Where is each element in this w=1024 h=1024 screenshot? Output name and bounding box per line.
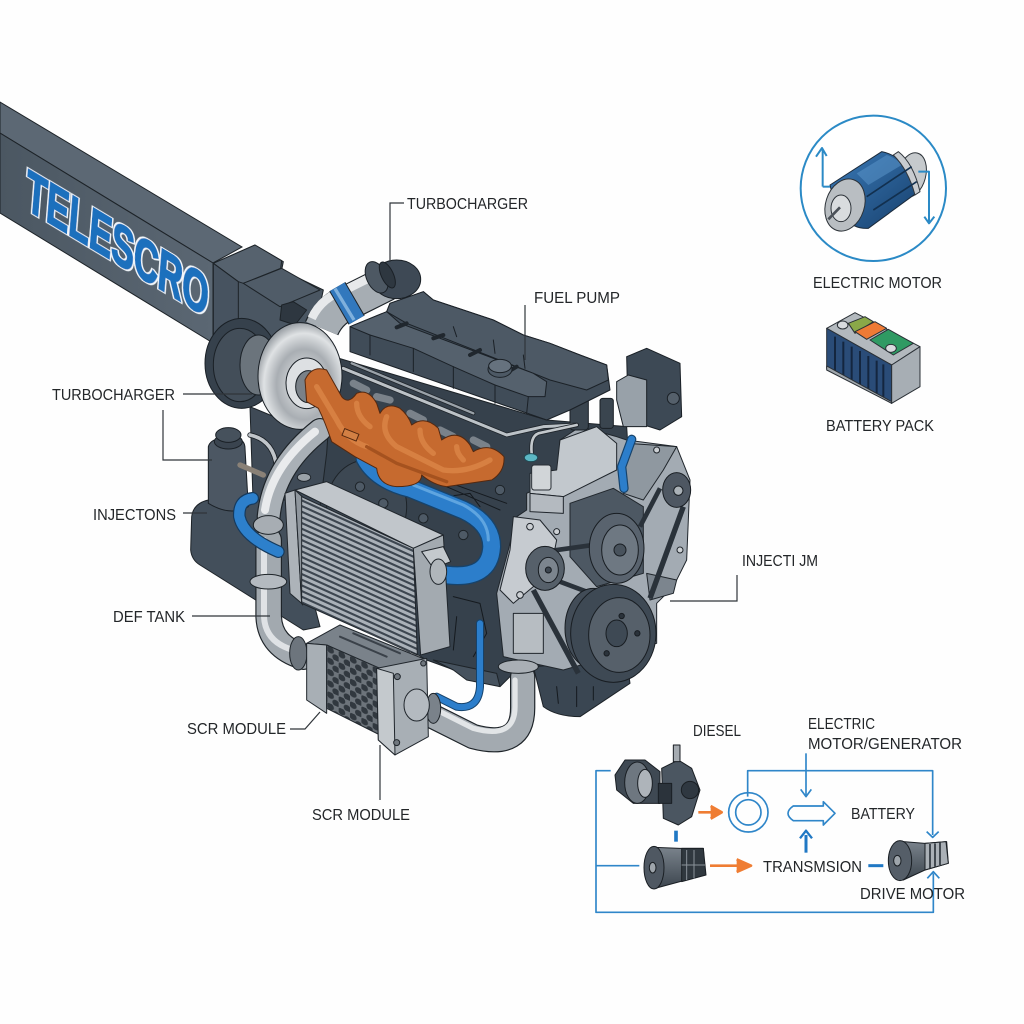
label: electric motor/generator: MOTOR/GENERATOR xyxy=(808,736,962,753)
upper turbocharger clamp xyxy=(361,258,421,299)
label: battery: BATTERY xyxy=(851,806,915,823)
battery pack icon xyxy=(827,313,920,403)
label: electric motor/generator: ELECTRIC xyxy=(808,716,875,733)
SCR module xyxy=(307,625,429,755)
label: turbocharger left: TURBOCHARGER xyxy=(52,387,175,404)
left blue hose xyxy=(239,498,278,552)
icon: drive motor xyxy=(888,841,948,881)
exhaust outlet pipe xyxy=(420,660,538,740)
label: fuel pump: FUEL PUMP xyxy=(534,290,620,307)
valve cover xyxy=(350,292,610,420)
electronics box xyxy=(570,348,682,430)
boom text: TELESCRO: TELESCRO xyxy=(24,157,211,329)
intercooler xyxy=(285,473,451,655)
label: diesel: DIESEL xyxy=(693,723,741,740)
timing cover and front housing xyxy=(497,427,690,670)
fuel rail xyxy=(343,363,577,490)
label: injectons: INJECTONS xyxy=(93,507,176,524)
silver intake pipe: lower run xyxy=(250,430,320,670)
blue return line xyxy=(437,439,632,707)
leader lines xyxy=(163,203,737,800)
blue arrow up and dashes xyxy=(676,831,883,866)
powertrain flow diagram xyxy=(596,745,948,912)
label: scr module bottom: SCR MODULE xyxy=(312,807,410,824)
electric motor icon xyxy=(801,116,946,261)
label: battery pack: BATTERY PACK xyxy=(826,418,935,435)
engine illustration xyxy=(191,245,691,755)
icon: transmission unit xyxy=(644,846,706,889)
label: electric motor: ELECTRIC MOTOR xyxy=(813,275,942,292)
label: def tank: DEF TANK xyxy=(113,609,186,626)
boom collar xyxy=(213,245,323,357)
pulleys xyxy=(526,473,691,682)
telescopic boom xyxy=(0,102,242,343)
DEF tank xyxy=(191,407,330,630)
silver intake pipe: upper bend xyxy=(312,273,387,328)
label: injection right: INJECTI JM xyxy=(742,553,818,570)
label: transmission: TRANSMSION xyxy=(763,859,862,876)
engine block xyxy=(320,357,630,717)
icon: diesel engine unit xyxy=(615,745,700,825)
label: turbocharger top: TURBOCHARGER xyxy=(407,196,528,213)
flow lines xyxy=(596,753,939,912)
belts xyxy=(533,488,683,673)
blue coolant hose behind manifold xyxy=(365,458,492,576)
orange arrows xyxy=(698,806,751,872)
injector details xyxy=(353,383,487,447)
exhaust manifold xyxy=(305,369,504,487)
turbocharger xyxy=(205,318,342,429)
label: drive motor: DRIVE MOTOR xyxy=(860,886,965,903)
label: scr module left: SCR MODULE xyxy=(187,721,286,738)
reservoir xyxy=(208,428,277,511)
